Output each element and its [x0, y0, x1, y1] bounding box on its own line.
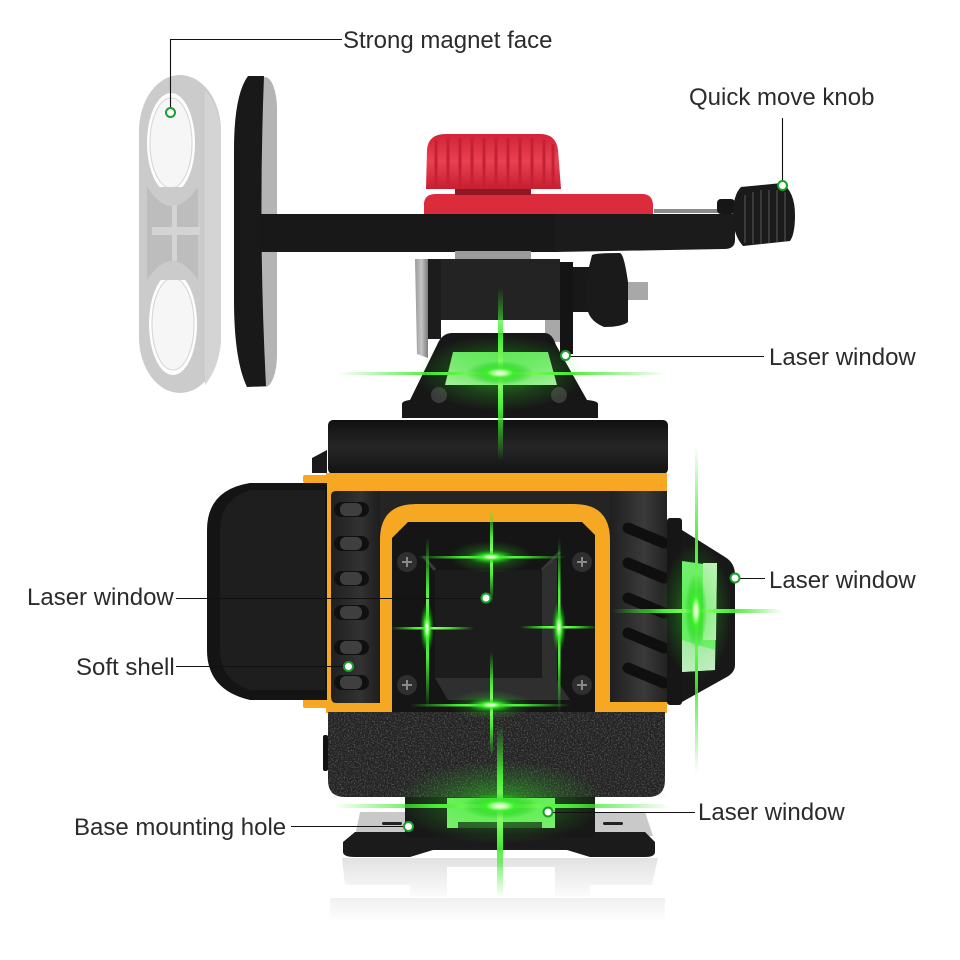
callout: bottom laser window	[544, 799, 845, 826]
red knob and base	[424, 134, 653, 214]
dark band above the front arch	[380, 491, 667, 702]
magnet mounting bracket	[234, 76, 559, 387]
callout: quick move knob	[689, 84, 874, 190]
callout: front laser window	[27, 584, 490, 611]
callout: base mounting hole	[74, 814, 413, 841]
callout: side laser window: Laser window	[769, 567, 916, 594]
soft shell right panel	[610, 491, 667, 702]
swivel mount	[415, 251, 648, 358]
callout: quick move knob: Quick move knob	[689, 84, 874, 111]
callout: strong magnet face: Strong magnet face	[343, 27, 552, 54]
lower body base	[323, 712, 665, 797]
callout: soft shell: Soft shell	[76, 654, 175, 681]
quick move knob	[733, 183, 795, 246]
callout: base mounting hole: Base mounting hole	[74, 814, 286, 841]
magnet plate (ghosted)	[139, 75, 221, 393]
top laser window	[402, 333, 598, 418]
main body top cap	[312, 420, 668, 474]
green laser beams	[334, 288, 782, 897]
callout: bottom laser window: Laser window	[698, 799, 845, 826]
crossbar right end and rod	[555, 199, 735, 252]
battery pack	[207, 483, 327, 700]
soft shell left panel	[331, 491, 380, 703]
callout: top laser window	[561, 344, 916, 371]
yellow body band	[303, 473, 667, 713]
base mount foot	[343, 797, 655, 857]
floor reflection	[330, 858, 665, 922]
front laser window	[392, 522, 595, 713]
callout: front laser window: Laser window	[27, 584, 174, 611]
callout: soft shell	[76, 654, 353, 681]
callout: strong magnet face	[166, 27, 552, 117]
side laser window	[667, 518, 735, 705]
callout: top laser window: Laser window	[769, 344, 916, 371]
